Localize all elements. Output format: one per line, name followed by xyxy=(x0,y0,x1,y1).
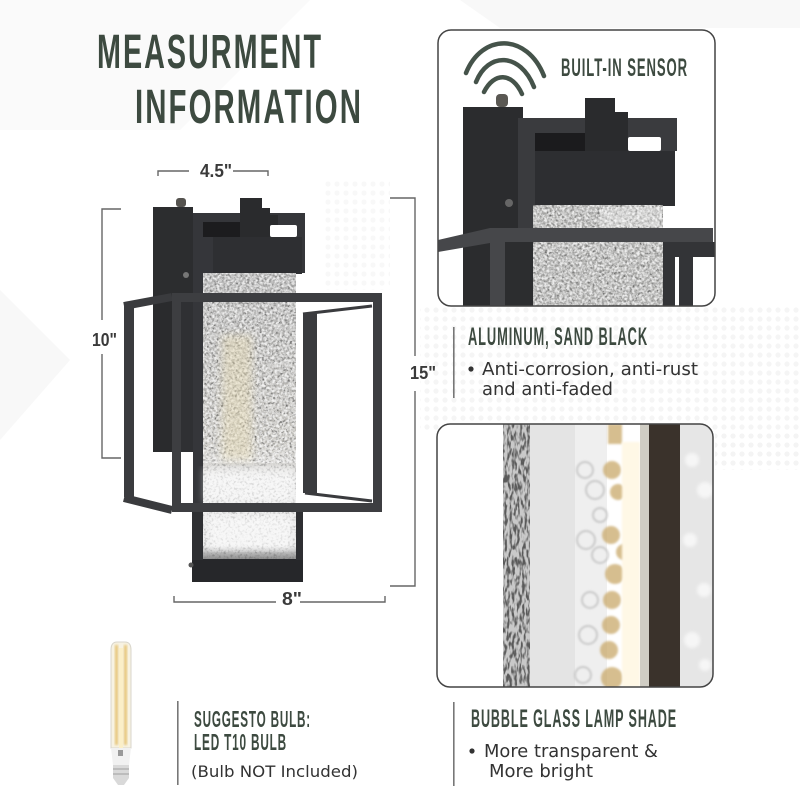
white gap below backplate xyxy=(180,455,193,497)
top cap xyxy=(213,237,302,274)
backplate xyxy=(153,207,193,320)
text block: bubble glass: More transparent & xyxy=(484,741,658,762)
panel: bubble glass xyxy=(437,424,713,689)
text block: suggested bulb: SUGGESTO BULB: xyxy=(194,706,311,732)
title xyxy=(97,26,363,134)
rear cage xyxy=(124,297,372,510)
top post xyxy=(240,198,278,238)
dimension: 10 inch height xyxy=(92,209,121,458)
dimension: 15 inch height: 15" xyxy=(410,363,436,383)
dimension: 10 inch height: 10" xyxy=(92,330,117,350)
text block: aluminum: and anti-faded xyxy=(482,379,613,400)
front cage xyxy=(176,298,378,508)
dimension: 4.5 inch width: 4.5" xyxy=(200,161,232,181)
icon: LED T10 bulb xyxy=(111,642,131,785)
glass close-up xyxy=(503,424,713,689)
side screw xyxy=(183,272,189,278)
title: MEASURMENT xyxy=(97,26,323,79)
text block: suggested bulb: (Bulb NOT Included) xyxy=(191,762,358,781)
dimension: 4.5 inch width xyxy=(158,161,268,181)
rear frame xyxy=(193,213,305,560)
base cap xyxy=(192,559,303,582)
sensor lamp close-up xyxy=(438,98,715,306)
dimension: 8 inch width xyxy=(174,589,385,609)
icon: sensor waves xyxy=(466,43,544,94)
glass shade xyxy=(203,273,296,560)
text block: aluminum: Anti-corrosion, anti-rust xyxy=(482,359,698,380)
bulb glow xyxy=(222,335,252,460)
text block: bubble glass: More bright xyxy=(489,761,593,782)
dimension: 8 inch width: 8" xyxy=(282,589,302,609)
sensor nub xyxy=(176,198,186,207)
panel: built-in sensor xyxy=(438,30,715,306)
dimension: 15 inch height xyxy=(390,198,436,586)
text block: aluminum xyxy=(453,323,698,400)
text block: bubble glass xyxy=(453,702,677,786)
sensor label: BUILT-IN SENSOR xyxy=(561,54,688,82)
main lamp illustration xyxy=(124,198,378,582)
text block: suggested bulb xyxy=(177,701,358,785)
text block: suggested bulb: LED T10 BULB xyxy=(194,729,287,755)
sensor nub xyxy=(496,94,508,107)
title: INFORMATION xyxy=(135,81,363,134)
amber bubbles xyxy=(598,424,624,686)
